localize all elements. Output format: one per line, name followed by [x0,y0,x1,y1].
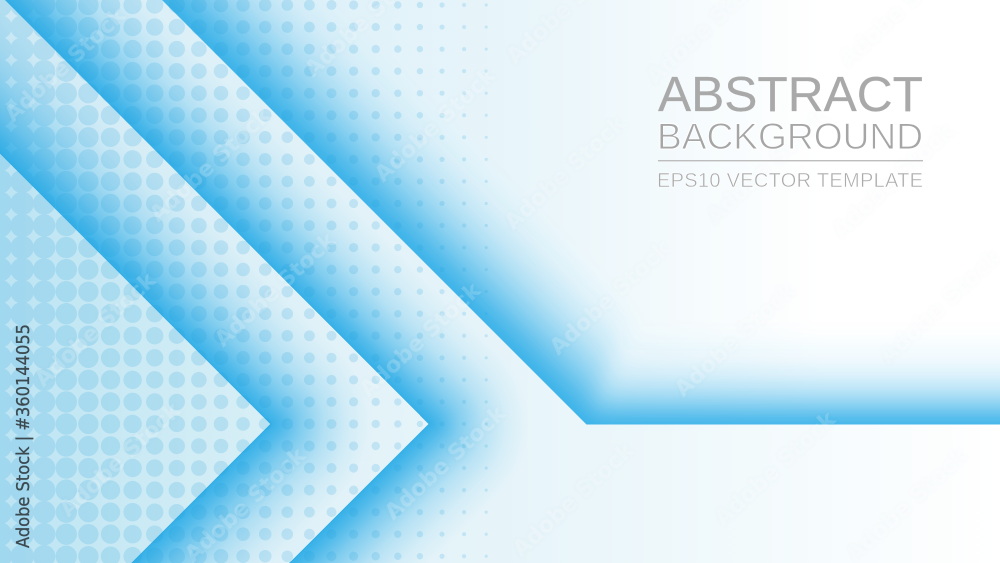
divider rule [658,160,923,161]
shadow of lower layer on background [100,0,1000,458]
watermarks: Adobe Stock [355,277,487,402]
watermarks: Adobe Stock [828,118,960,243]
halftone dot grid [0,5,486,563]
watermarks: Adobe Stock [710,406,842,531]
watermarks: Adobe Stock [380,400,512,525]
watermarks: Adobe Stock [210,227,342,352]
watermarks: Adobe Stock [500,110,632,235]
shadow of chevron two on lower layer [0,0,570,563]
watermarks: Adobe Stock [670,277,802,402]
watermarks: Adobe Stock [55,397,187,522]
shadow of chevron one on chevron two [0,0,411,563]
vertical stock credit: Adobe Stock | #360144055 [13,324,34,548]
panel: chevron one [0,124,270,563]
subtitle: background: BACKGROUND [657,116,923,157]
watermarks: Adobe Stock [508,437,640,562]
title: abstract: ABSTRACT [658,68,923,122]
watermarks: Adobe Stock [30,267,162,392]
title block [657,68,923,192]
caption: template: EPS10 VECTOR TEMPLATE [657,170,923,192]
watermarks: Adobe Stock [0,2,132,127]
panel: chevron two [0,0,428,563]
watermarks: Adobe Stock [145,102,277,227]
watermarks: Adobe Stock [370,62,502,187]
watermarks: Adobe Stock [702,104,834,229]
watermarks: Adobe Stock [545,235,677,360]
